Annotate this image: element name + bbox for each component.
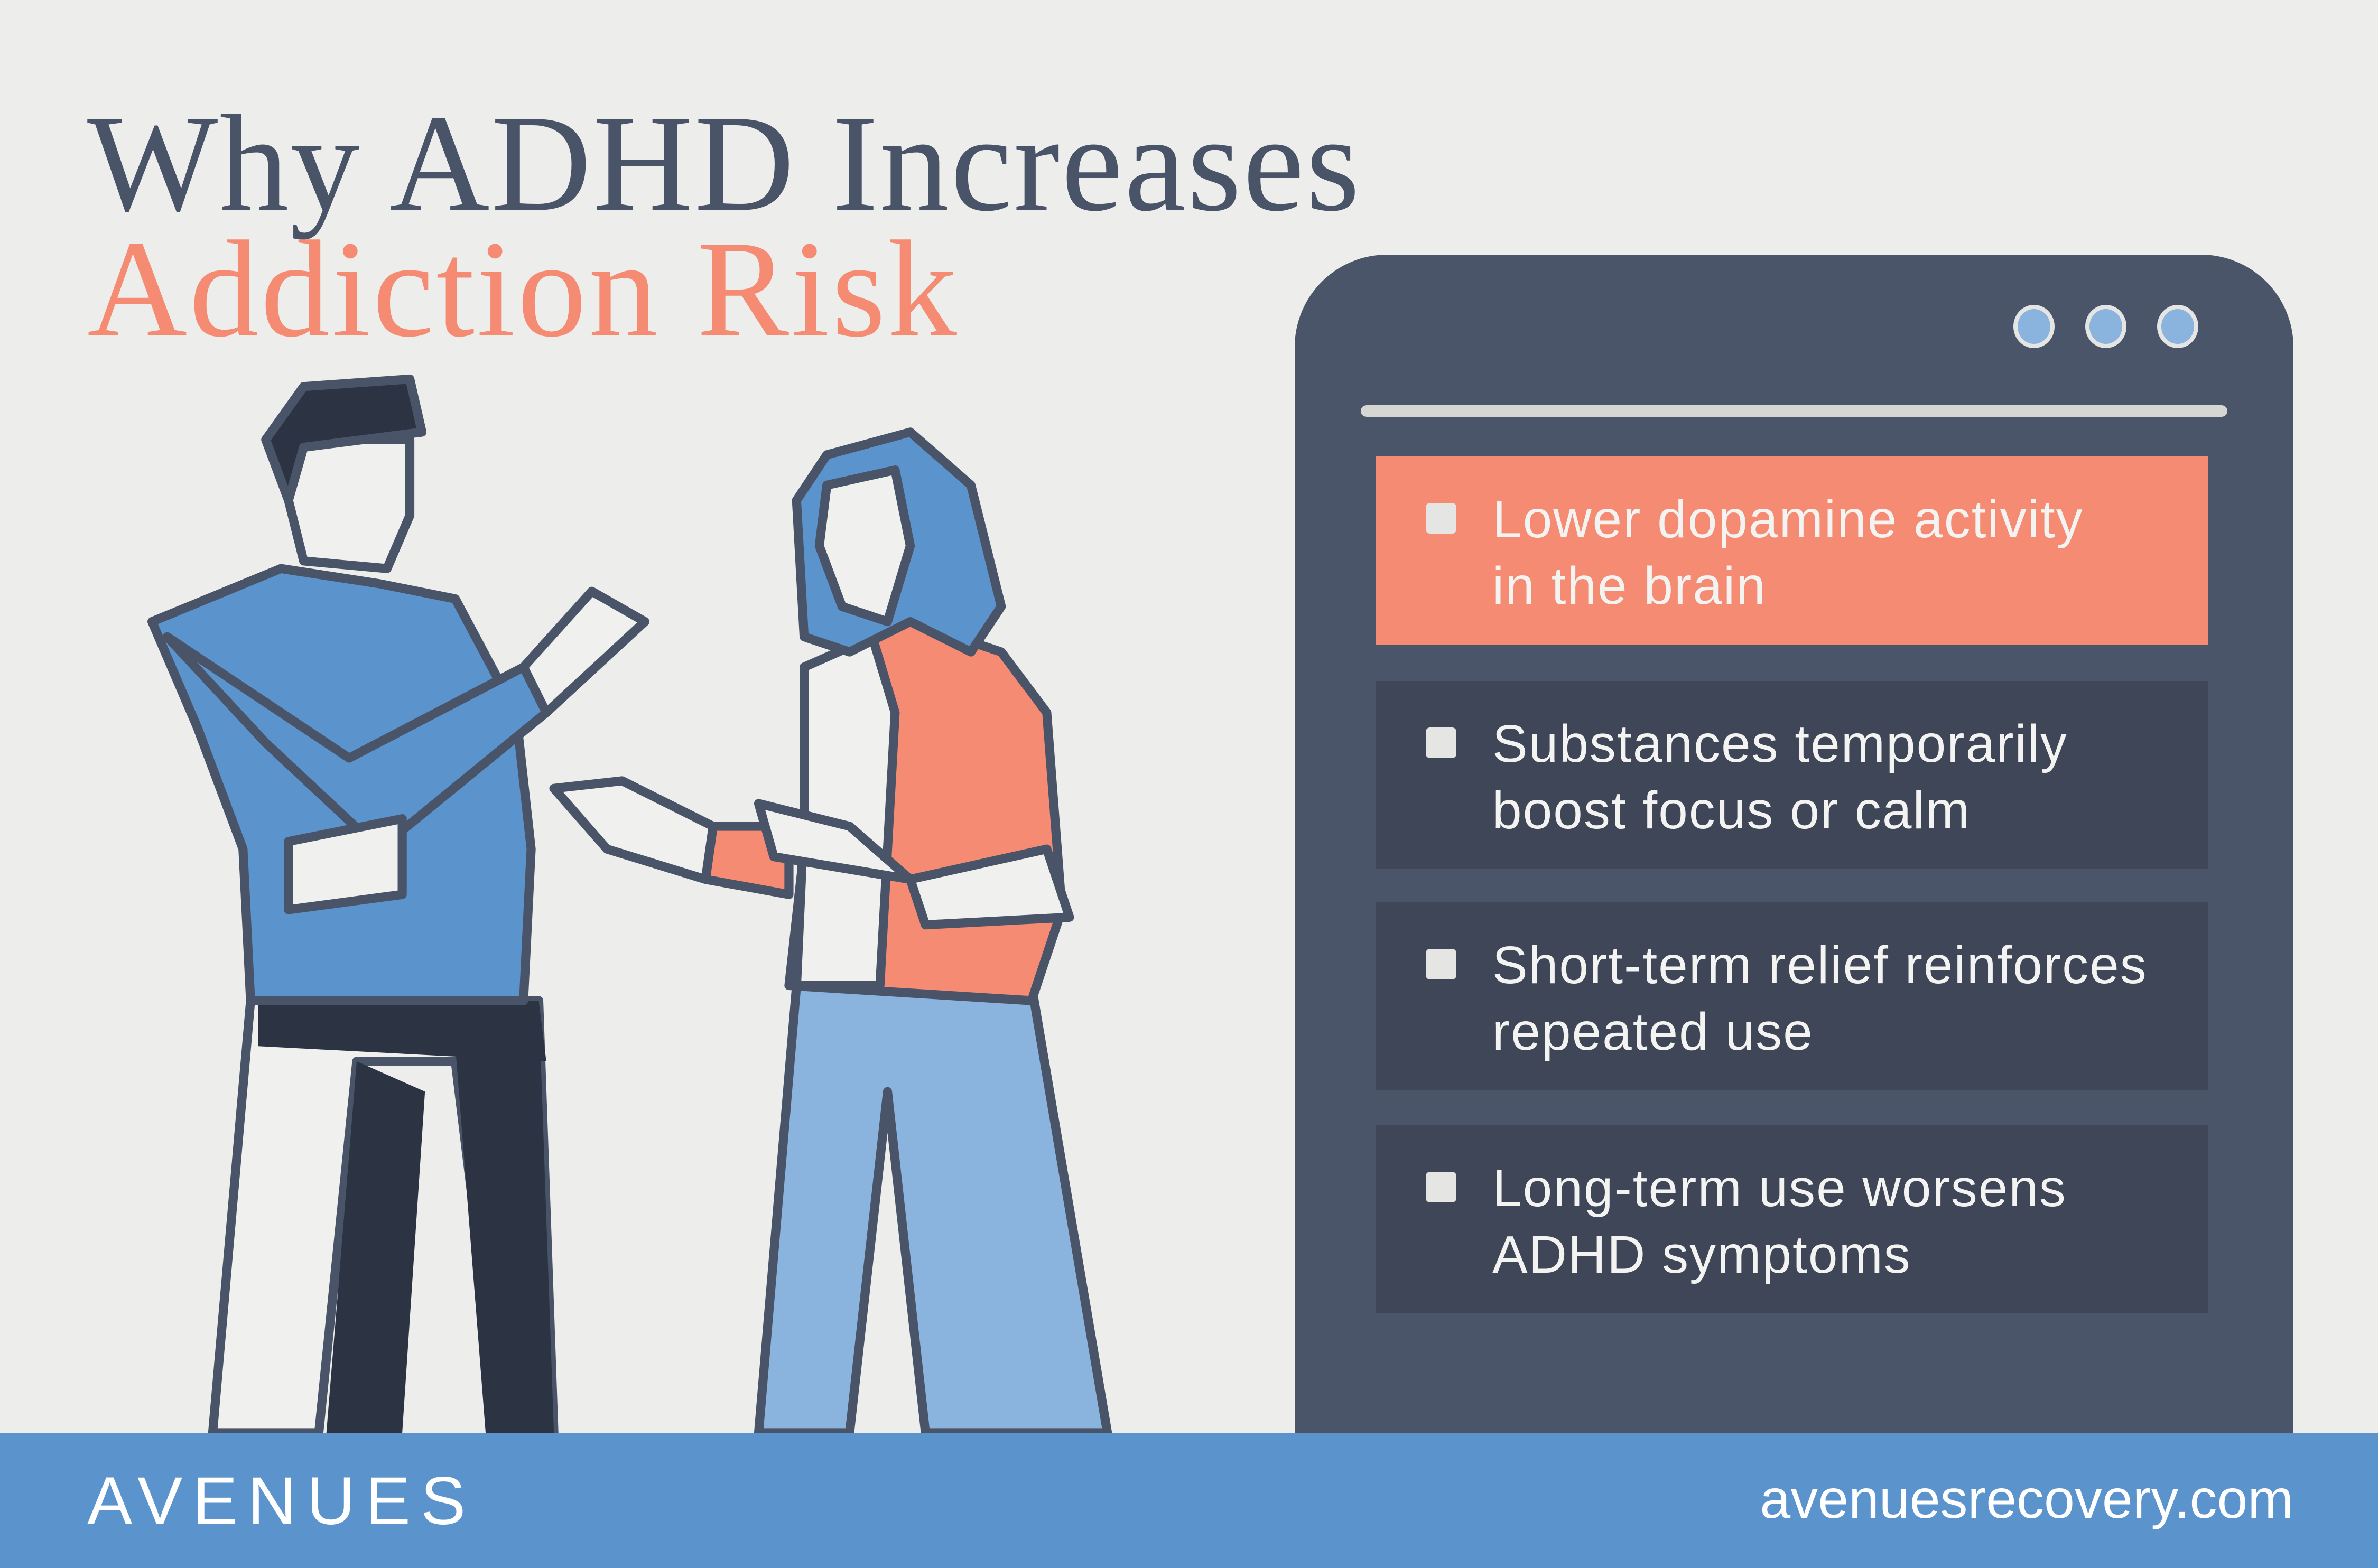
item 4: ADHD symptoms: [1492, 1225, 1911, 1284]
man legs: [212, 1001, 554, 1433]
item 1: [1376, 456, 2208, 645]
logo: AVENUES: [87, 1463, 476, 1539]
item 4: [1376, 1125, 2208, 1313]
title: [87, 87, 1361, 366]
window dots: [2013, 305, 2198, 348]
item 1: in the brain: [1492, 556, 1767, 615]
item 3: [1376, 902, 2208, 1090]
illustration: two people talking: [147, 374, 1112, 1433]
woman torso: [554, 622, 1070, 1001]
footer: [0, 1433, 2378, 1568]
item 3: repeated use: [1492, 1002, 1814, 1061]
url: avenuesrecovery.com: [1760, 1469, 2293, 1530]
woman legs: [759, 985, 1108, 1433]
title: Why ADHD Increases: [87, 87, 1361, 240]
man head: [266, 379, 422, 568]
item 2: boost focus or calm: [1492, 781, 1971, 840]
item 2: Substances temporarily: [1492, 714, 2068, 773]
title: Addiction Risk: [87, 212, 959, 366]
item 4: Long-term use worsens: [1492, 1159, 2067, 1218]
item 1: Lower dopamine activity: [1492, 490, 2084, 549]
woman head: [796, 432, 1001, 652]
panel: reasons: [1295, 255, 2293, 1523]
man torso: [152, 568, 645, 1001]
item 2: [1376, 681, 2208, 869]
item 3: Short-term relief reinforces: [1492, 936, 2148, 995]
